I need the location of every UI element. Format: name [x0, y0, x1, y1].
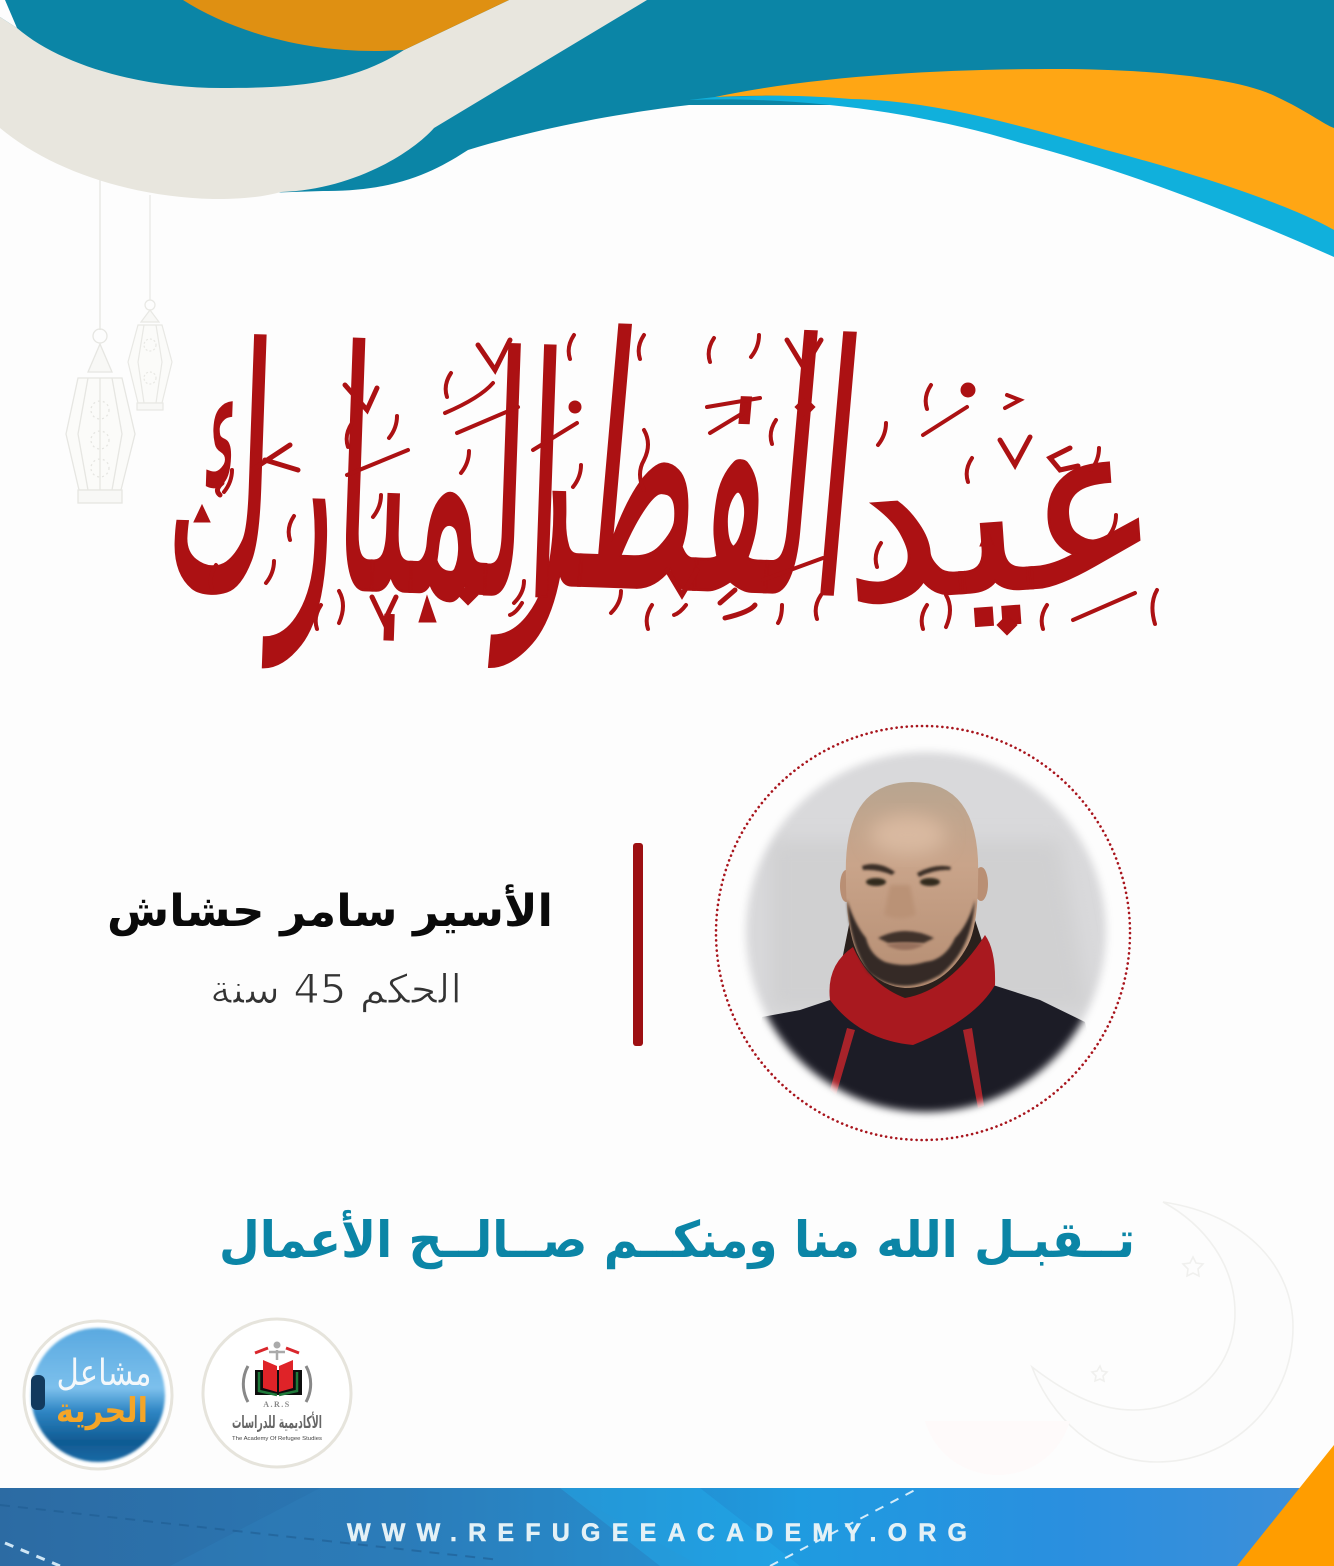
sentence text: الحكم 45 سنة: [210, 967, 462, 1013]
vertical red divider: [633, 843, 643, 1046]
calligraphy ornament marks: [211, 335, 1157, 629]
nose: [886, 885, 914, 916]
logo: Academy of Refugee Studies: The Academy Of Refugee Studies: [232, 1436, 322, 1442]
icon: faint crescent with stars: [1032, 1202, 1293, 1462]
logo: Academy of Refugee Studies: الأكاديمية للدراسات: [232, 1412, 322, 1433]
ears: [840, 870, 847, 902]
logo: Academy of Refugee Studies: A.R.S: [263, 1400, 291, 1409]
website address: WWW.REFUGEEACADEMY.ORG: [347, 1519, 967, 1547]
word: Eid: عيد: [831, 367, 1168, 656]
eyes and brows: [862, 864, 951, 877]
faint pink blob: [925, 1421, 1070, 1475]
logo: Mashael Al-Hurriya: الحرية: [56, 1391, 148, 1431]
dotted ring: [716, 726, 1130, 1140]
footer bar: [0, 1445, 1334, 1566]
logo: Mashael Al-Hurriya: [24, 1321, 172, 1469]
red collar: [829, 935, 995, 1045]
beard: [847, 900, 975, 986]
prisoner name: الأسير سامر حشاش: [107, 884, 553, 937]
icon: hanging lantern large: [66, 180, 135, 503]
photo disc: [743, 749, 1109, 1118]
logo: Mashael Al-Hurriya: مشاعل: [56, 1353, 152, 1394]
closing greeting line: تــقبـل الله منا ومنكــم صــالــح الأعمال: [219, 1209, 1135, 1270]
hoodie: [762, 986, 1086, 1118]
icon: hanging lantern small: [128, 195, 172, 410]
head: [846, 782, 978, 988]
logo: Academy of Refugee Studies: [203, 1319, 351, 1467]
orange corner: [1237, 1445, 1334, 1566]
top wave banner: [0, 0, 1334, 257]
neck shadow: [842, 920, 985, 1000]
portrait photo: [716, 726, 1130, 1140]
book: [255, 1370, 302, 1395]
title calligraphy: المبارك: [162, 277, 570, 679]
